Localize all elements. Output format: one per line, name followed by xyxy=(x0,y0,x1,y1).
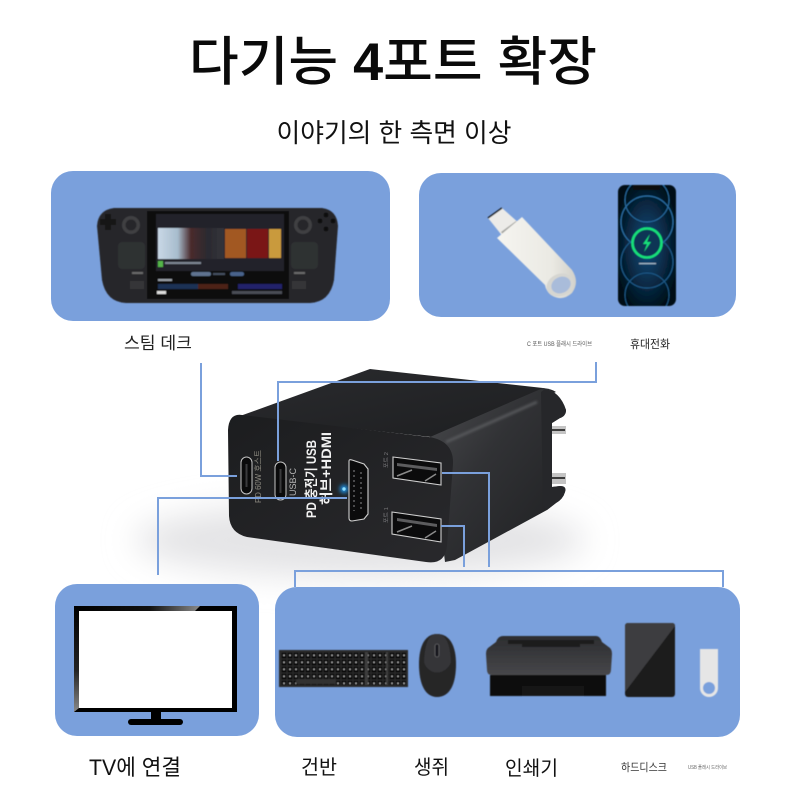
icon: mouse xyxy=(419,634,456,697)
connector: usb-c devices to usb-c port xyxy=(278,362,596,461)
indicator light xyxy=(340,485,348,493)
label: tv: TV에 연결 xyxy=(89,755,181,780)
icon: usb drive xyxy=(700,649,718,697)
text: product name: 허브+HDMI xyxy=(319,432,334,505)
label: steam deck: 스팀 데크 xyxy=(124,334,192,353)
port: usb 1 xyxy=(392,512,441,542)
port: usb-c xyxy=(275,462,286,500)
subtitle: 이야기의 한 측면 이상 xyxy=(276,118,512,148)
label: usb flash drive: USB 플래시 드라이브 xyxy=(688,764,727,771)
connector: tv to hdmi port xyxy=(158,498,347,575)
port: usb 2 xyxy=(393,457,441,485)
connector: usb 1 xyxy=(441,526,464,567)
connector: usb 2 xyxy=(442,473,489,567)
port: usb-c host xyxy=(241,457,252,494)
text: port 1: 포트 1 xyxy=(383,507,390,523)
label: printer: 인쇄기 xyxy=(505,757,558,780)
text: port 2: 포트 2 xyxy=(383,452,390,468)
title: 다기능 4포트 확장 xyxy=(189,33,597,92)
label: phone: 휴대전화 xyxy=(630,338,670,351)
icon: usb-c flash drive xyxy=(488,208,577,301)
charger shadow xyxy=(135,502,585,578)
body side xyxy=(430,388,566,562)
connector: steam deck to host port xyxy=(201,363,237,476)
screen xyxy=(147,211,289,299)
panel: usb-c drive and phone xyxy=(419,173,736,317)
panel: steam deck xyxy=(51,171,390,321)
text: product name: PD 충전기 USB xyxy=(304,440,319,518)
label: usb-c flash drive: C 포트 USB 플래시 드라이브 xyxy=(527,340,592,348)
icon: steam deck console xyxy=(97,208,338,303)
icon: printer xyxy=(486,636,612,696)
charger xyxy=(228,369,566,562)
icon: keyboard xyxy=(279,650,408,687)
text: USB-C: USB-C xyxy=(288,468,298,496)
icon: hard disk xyxy=(625,623,675,697)
label: mouse: 생쥐 xyxy=(414,756,449,779)
label: hard disk: 하드디스크 xyxy=(621,760,667,774)
text: PD 60W host: PD 60W 호스트 xyxy=(253,450,263,503)
icon: phone charging xyxy=(618,178,676,317)
connector: bracket for usb devices xyxy=(295,571,723,587)
port: hdmi xyxy=(349,460,368,521)
icon: tv xyxy=(74,606,237,725)
label: keyboard: 건반 xyxy=(301,756,337,779)
body top xyxy=(240,369,556,438)
front face xyxy=(228,415,453,562)
panel: usb devices xyxy=(275,587,740,737)
text: product name xyxy=(304,432,334,518)
prongs xyxy=(550,426,566,484)
panel: tv xyxy=(55,584,259,736)
